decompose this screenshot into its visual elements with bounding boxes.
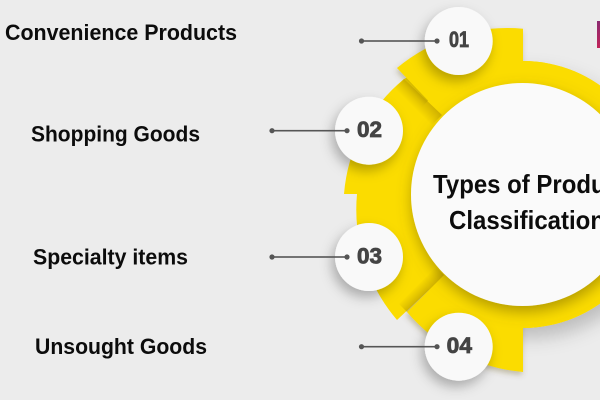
item 02 xyxy=(31,97,403,165)
label 02: Shopping Goods xyxy=(31,122,200,147)
connector 02 xyxy=(269,128,350,133)
seam shading bottom xyxy=(399,267,444,312)
item 01 xyxy=(5,7,493,75)
segment 2 xyxy=(344,76,450,196)
number 04: 04 xyxy=(447,333,473,358)
label 01: Convenience Products xyxy=(5,20,237,45)
badge 01 xyxy=(425,7,493,75)
badge 04 xyxy=(425,313,493,381)
segment 3 xyxy=(356,194,450,320)
segment 4 xyxy=(407,275,523,372)
title xyxy=(433,169,600,235)
badge 03 xyxy=(335,223,403,291)
center circle xyxy=(411,83,600,306)
segment 1 xyxy=(397,28,523,115)
connector 04 xyxy=(359,344,440,349)
connector 01 xyxy=(359,38,440,44)
number 03: 03 xyxy=(357,244,382,268)
ring shadow xyxy=(390,61,600,328)
seam shading top xyxy=(394,79,442,125)
number 02: 02 xyxy=(357,117,382,142)
number 01: 01 xyxy=(449,27,469,52)
badge 02 xyxy=(335,97,403,165)
label 04: Unsought Goods xyxy=(35,334,207,359)
item 03 xyxy=(33,223,403,291)
logo fragment xyxy=(597,21,600,48)
ring xyxy=(390,61,600,328)
item 04 xyxy=(35,313,493,381)
label 03: Specialty items xyxy=(33,244,188,270)
yellow gear xyxy=(344,28,600,372)
connector 03 xyxy=(269,254,350,260)
